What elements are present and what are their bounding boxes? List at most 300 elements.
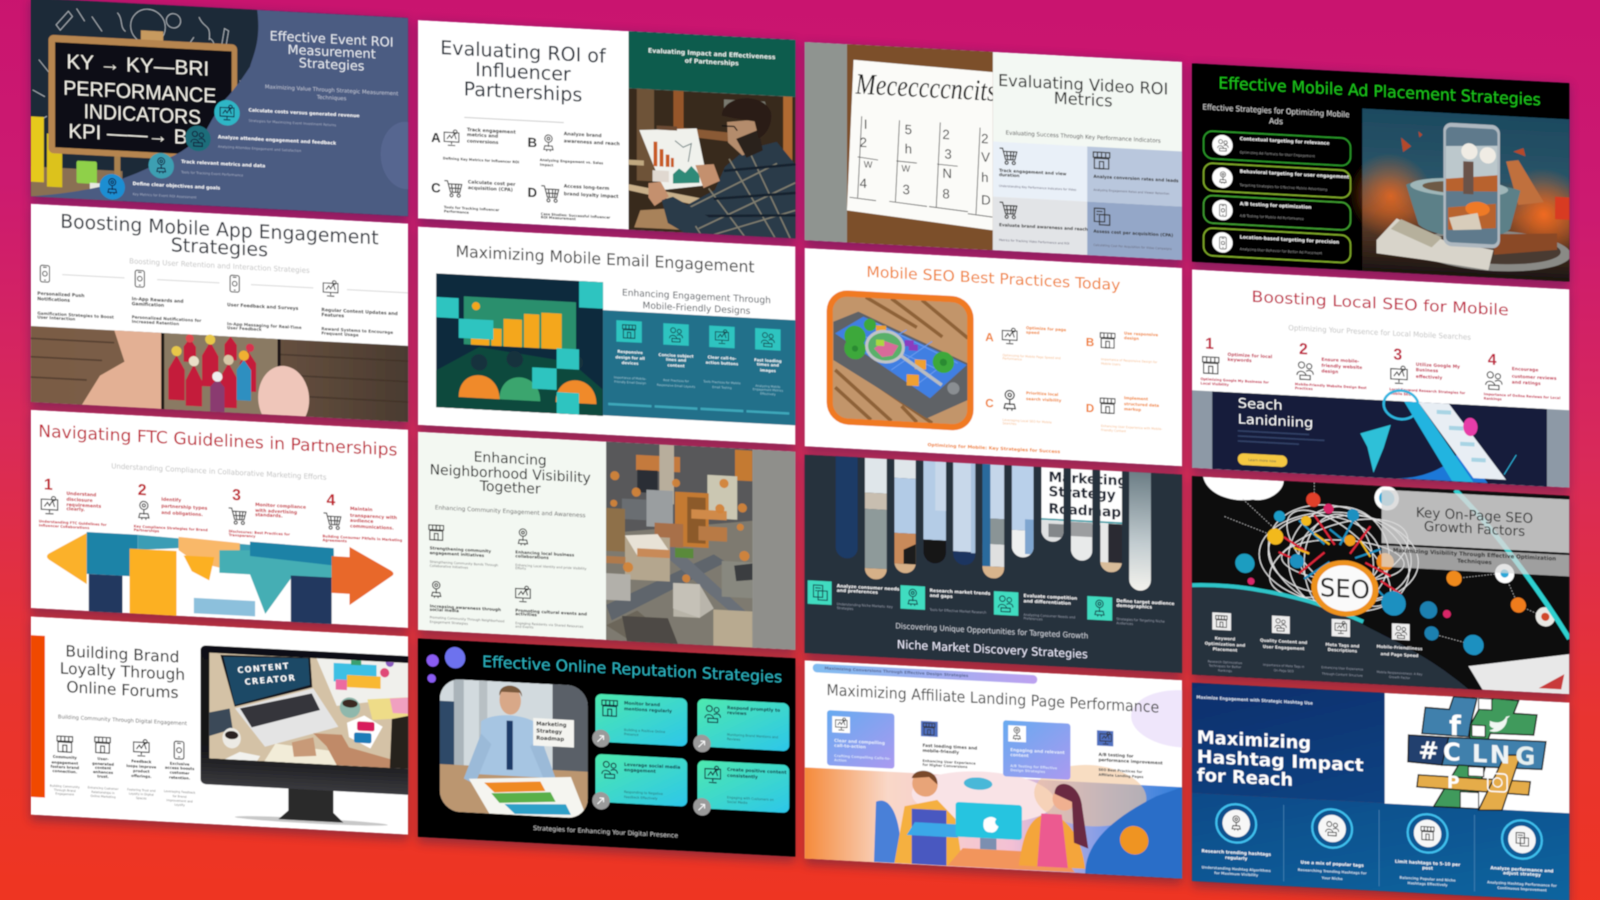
title: Maximizing Mobile Email Engagement <box>456 242 755 276</box>
metric notes: Calculating Cost Per Acquisition for Video Campaigns <box>1093 243 1172 251</box>
item headings: content <box>1010 752 1029 759</box>
item notes: Case Studies: Successful Influencer <box>541 212 611 220</box>
factor headings: Keyword <box>1215 635 1235 642</box>
icons row <box>40 265 338 297</box>
item notes: Understanding Niche Markets: Key <box>837 602 893 609</box>
photo: handwritten table on wood: W <box>864 159 873 170</box>
item notes: ROI Measurement <box>541 215 576 221</box>
ring icons <box>1216 803 1542 860</box>
icons row <box>1203 356 1502 390</box>
list of measures: Analyze attendee engagement and feedback <box>218 134 337 147</box>
item notes: for Brand <box>173 794 187 799</box>
connector lines <box>62 275 408 293</box>
step notes: Transparency <box>229 533 256 538</box>
monitor screen labels: CONTENT <box>237 661 290 675</box>
board text: INDICATORS <box>84 101 201 129</box>
step headings: customer reviews <box>1512 374 1557 382</box>
step notes: Importance of Online Reviews for Local <box>1484 392 1560 400</box>
title: Maximizing Affiliate Landing Page Performance <box>827 681 1159 717</box>
item headings: product <box>133 769 150 774</box>
arrow buttons <box>592 729 711 816</box>
card headings: consistently <box>727 773 758 780</box>
step notes: Gamification Strategies to Boost <box>37 311 114 320</box>
factor headings: Mobile-Friendliness <box>1377 644 1423 651</box>
item headings: A/B testing for <box>1098 752 1134 760</box>
step notes: Personalized Notifications for <box>132 314 202 323</box>
hashtag symbols: P <box>1447 773 1460 794</box>
slide: Niche Market Discovery Strategies <box>805 442 1182 673</box>
metric headings: Track engagement and view <box>999 168 1067 177</box>
subtitle: Optimizing Your Presence for Local Mobile Searches <box>1288 323 1471 342</box>
title: for Reach <box>1197 765 1293 791</box>
title: Strategies <box>299 56 365 75</box>
list of measures: Calculate costs versus generated revenue <box>248 107 360 119</box>
subtitle: Understanding Compliance in Collaborative Marketing Efforts <box>111 461 327 482</box>
factor headings: Descriptions <box>1328 647 1358 654</box>
item headings: loops improve <box>126 764 157 770</box>
step notes: Rankings <box>1484 396 1502 401</box>
card notes: Responding to Negative <box>624 790 663 796</box>
item notes: Efforts <box>515 566 526 571</box>
practice notes: Friendly Content <box>1101 428 1127 433</box>
photo: handwritten table on wood: 3 <box>903 182 910 197</box>
icon: purple dots <box>427 645 465 684</box>
item headings: Research market trends <box>930 588 991 597</box>
step notes: Reward Systems to Encourage <box>321 326 393 335</box>
card notes: Monitoring Brand Mentions and <box>727 733 778 739</box>
step headings: standards. <box>255 512 283 519</box>
list of measure notes: Key Metrics for Event ROI Assessment <box>133 192 197 200</box>
practice headings: Use responsive <box>1124 330 1158 337</box>
practice notes: Performance <box>1003 356 1022 361</box>
photo: handwritten table on wood: V <box>981 149 990 165</box>
column headings: Analyze performance and <box>1490 865 1553 875</box>
title: Building Brand <box>65 642 179 666</box>
practice notes: Searches <box>1003 421 1017 426</box>
side strip <box>753 449 795 650</box>
photo: handwritten table on wood: 5 <box>905 122 912 137</box>
item headings: devices <box>622 360 639 366</box>
letter markers: B <box>1086 336 1094 349</box>
step headings: Monitor compliance <box>255 502 306 511</box>
item headings: call-to-action <box>834 743 866 750</box>
title: Strategies <box>171 233 268 261</box>
subtitle: Discovering Unique Opportunities for Targeted Growth <box>895 621 1088 641</box>
item notes: Performance <box>444 209 470 215</box>
hashtag graphic panel <box>1385 693 1570 815</box>
photo: handwritten table on wood: I <box>864 117 867 132</box>
title: Growth Factors <box>1424 519 1525 540</box>
item headings: Promoting cultural events and <box>515 608 587 617</box>
item headings: awareness and reach <box>564 138 620 147</box>
icons <box>1002 328 1115 416</box>
column headings: post <box>1422 865 1433 872</box>
factor headings: User Engagement <box>1263 644 1305 651</box>
heading: Enhancing Engagement Through <box>622 288 771 306</box>
item notes: Engagement <box>55 792 75 797</box>
item headings: and gaps <box>930 593 953 600</box>
column notes: Continuous Improvement <box>1497 886 1547 892</box>
item notes: Leveraging Feedback <box>164 789 196 795</box>
title: Boosting Mobile App Engagement <box>60 210 379 249</box>
column headings: regularly <box>1225 855 1248 862</box>
step numbers: 3 <box>232 487 241 504</box>
column notes: Analyzing Hashtag Performance for <box>1487 880 1557 888</box>
item notes: Engagement Metrics <box>753 387 784 393</box>
item headings: action buttons <box>706 360 739 366</box>
title: Boosting Local SEO for Mobile <box>1252 288 1509 319</box>
photo: handwritten table on wood: 3 <box>944 146 952 162</box>
item headings: Fast loading times and <box>922 743 977 752</box>
item notes: Tools for Tracking Influencer <box>444 205 500 212</box>
step headings: clearly. <box>66 506 85 513</box>
title: Online Forums <box>66 678 179 702</box>
item notes: Collaborative Initiatives <box>430 564 468 570</box>
step headings: transparency with <box>350 513 397 521</box>
hashtag symbols: G <box>1515 741 1535 771</box>
item headings: demographics <box>1116 603 1152 611</box>
step headings: partnership types <box>161 503 208 512</box>
slide: Maximizing Affiliate Landing Page Performance <box>805 660 1233 882</box>
step notes: Mobile-Friendly Website Design Best <box>1295 382 1367 390</box>
pill headings: Contextual targeting for relevance <box>1240 136 1329 147</box>
item notes <box>834 754 1143 779</box>
item notes: Loyalty in Digital <box>129 791 154 797</box>
metric notes: Metrics for Tracking Video Performance and ROI <box>999 238 1070 246</box>
highlighted cards <box>827 710 1070 780</box>
item notes: Enhancing User Experience <box>922 759 976 766</box>
column dividers <box>1284 805 1474 891</box>
item headings: User- <box>97 757 109 761</box>
item headings: enhances <box>93 770 114 775</box>
subtitle: Techniques <box>1457 558 1492 566</box>
item headings: content <box>95 766 111 771</box>
strategy pills <box>1204 131 1351 263</box>
item headings: customer <box>170 771 190 776</box>
hashtag symbols: C <box>1443 737 1461 767</box>
pill headings: A/B testing for optimization <box>1240 201 1311 211</box>
title: Evaluating Video ROI <box>998 71 1168 99</box>
step notes: Understanding FTC Guidelines for <box>39 519 107 527</box>
list of measure notes: Analyzing Attendee Engagement and Satisfaction <box>218 145 301 153</box>
crayons and desk <box>31 116 122 202</box>
photo: hands and figurines <box>30 325 409 423</box>
step numbers: 4 <box>327 492 336 509</box>
lavender blob <box>1131 688 1233 750</box>
item headings: social media <box>430 607 459 613</box>
slide: Key On-Page SEO Growth Factors <box>1192 476 1569 694</box>
step notes: Building Consumer Pitfalls in Marketing <box>322 534 403 543</box>
photo: handwritten table on wood: 2 <box>942 127 950 142</box>
photo: phone and cup <box>1348 108 1590 283</box>
photo: handwritten table on wood: h <box>981 170 989 185</box>
slide: Maximizing Hashtag Impact for Reach <box>1192 682 1570 900</box>
item headings: Evaluate competition <box>1023 593 1077 602</box>
factor headings: Meta Tags and <box>1325 642 1359 649</box>
item headings: Define target audience <box>1116 598 1174 607</box>
step headings: Notifications <box>37 296 70 304</box>
slide: Mobile SEO Best Practices Today <box>805 248 1182 466</box>
item headings: mobile-friendly <box>922 748 959 756</box>
item headings: connection. <box>52 769 78 774</box>
step headings: Understand <box>66 491 96 498</box>
step notes: Mobile SEO <box>1389 391 1411 397</box>
pill headings: Location-based targeting for precision <box>1240 234 1339 246</box>
step notes: Disclosures: Best Practices for <box>229 529 290 537</box>
factor notes: Enhancing User Experience <box>1321 665 1363 671</box>
photo: handwritten table on wood: N <box>942 166 952 181</box>
step notes: Local Visibility <box>1201 381 1230 387</box>
item headings: Access long-term <box>564 183 610 192</box>
item headings: conversions <box>467 138 499 146</box>
item notes: Strategies for Targeting Niche <box>1116 617 1165 624</box>
step headings: keywords <box>1228 357 1252 364</box>
practice headings: search visibility <box>1026 396 1062 403</box>
heading: Mobile-Friendly Designs <box>643 301 751 317</box>
board text: KY → KY—BRI <box>66 51 209 81</box>
card notes: Feedback Effectively <box>624 795 658 801</box>
title: Neighborhood Visibility <box>430 462 591 487</box>
item headings: Fast loading <box>754 357 782 364</box>
metric headings: duration <box>999 172 1020 179</box>
item headings: fosters brand <box>50 765 79 770</box>
item notes: Defining Key Metrics for Influencer ROI <box>443 156 519 164</box>
step headings: friendly website <box>1321 363 1362 371</box>
item notes: Responsive Email Layouts <box>657 383 696 389</box>
column notes: Your Niche <box>1321 876 1343 881</box>
metric headings: Assess cost per acquisition (CPA) <box>1093 229 1173 239</box>
item notes: SEO Best Practices for <box>1098 768 1142 774</box>
item notes: Effectively <box>760 392 776 396</box>
pill notes: Targeting Strategies for Effective Mobile Advertising <box>1239 183 1327 192</box>
network globe <box>1224 477 1555 659</box>
factor notes: On-Page SEO <box>1274 668 1294 673</box>
banner heading: Seach <box>1238 397 1283 414</box>
item notes: and Events <box>515 624 534 629</box>
step headings: requirements <box>66 502 101 510</box>
card notes: Presence <box>624 732 639 737</box>
item notes: Best Practices for <box>663 378 690 383</box>
item notes: Promoting Community Through Neighborhood <box>430 615 504 623</box>
slide: Boosting Mobile App Engagement <box>31 204 408 438</box>
item headings: Analyze brand <box>564 131 602 139</box>
item notes: Spaces <box>136 796 147 801</box>
item headings: acquisition (CPA) <box>468 185 513 193</box>
divider <box>464 117 564 123</box>
item headings: Enhancing local business <box>515 549 575 558</box>
tagline: Maximize Engagement with Strategic Hashtag Use <box>1196 695 1313 707</box>
item notes: Engagement Strategies <box>430 620 468 626</box>
item notes: Through Brand <box>53 788 76 793</box>
list of measures: Track relevant metrics and data <box>181 159 265 169</box>
step headings: In-App Rewards and <box>132 296 184 305</box>
item headings: Clear and compelling <box>834 738 885 747</box>
photo: handwritten table on wood: W <box>902 163 911 174</box>
practice notes: Enhancing User Experience with Mobile- <box>1101 424 1162 431</box>
metric notes: Understanding Key Performance Indicators for Video <box>999 184 1077 192</box>
card headings: Leverage social media <box>624 762 680 771</box>
step numbers: 2 <box>1299 341 1308 358</box>
title: Together <box>479 478 541 498</box>
footer line: Strategies for Enhancing Your Digital Presence <box>533 825 678 840</box>
item headings: Strengthening community <box>430 545 491 554</box>
step notes: Local Keyword Research Strategies for <box>1389 387 1465 395</box>
card headings: engagement <box>624 767 657 775</box>
item headings: performance improvement <box>1098 757 1163 766</box>
illustration: audience watching chart <box>436 273 603 416</box>
title: Maximizing <box>1197 727 1311 754</box>
letter markers: C <box>985 397 994 410</box>
header text: of Partnerships <box>685 58 739 67</box>
item notes: Design Strategies <box>1010 768 1045 774</box>
slide: Effective Event ROI Measurement Strategies <box>31 0 432 218</box>
hashtag symbols: N <box>1490 740 1510 770</box>
step headings: Utilize Google My <box>1416 362 1460 370</box>
list of measures <box>132 107 360 191</box>
item notes: Tools Practices for Mobile <box>702 379 741 385</box>
item headings: times and <box>757 362 779 368</box>
photo: man reading chart <box>629 88 796 239</box>
step numbers: 1 <box>44 476 53 494</box>
item headings: Increasing awareness through <box>430 603 501 612</box>
step headings: and ratings <box>1512 379 1541 387</box>
step notes: Influencer Collaborations <box>39 523 89 530</box>
factor notes: Mobile Responsiveness: A Key <box>1377 670 1423 676</box>
step notes: User Feedback <box>227 325 262 332</box>
step headings: Maintain <box>350 506 373 513</box>
factor icon tiles <box>1212 612 1410 640</box>
photo: handwritten table on wood: 4 <box>860 176 867 191</box>
tagline pill <box>813 663 1037 684</box>
item notes: Friendly Email Design <box>614 380 646 385</box>
header band <box>629 31 796 97</box>
title panel <box>1382 490 1569 577</box>
step headings: Ensure mobile- <box>1321 357 1359 365</box>
item notes: Loyalty <box>174 803 185 807</box>
item notes: Strategies <box>837 606 854 611</box>
illustration: handshake with arrows <box>47 530 393 628</box>
blackboard <box>48 25 237 163</box>
step numbers: 3 <box>1393 346 1402 364</box>
icon: step circles <box>99 93 240 206</box>
practice headings: markup <box>1124 406 1141 412</box>
letter markers: A <box>985 331 994 344</box>
footer line: Optimizing for Mobile: Key Strategies for Success <box>928 442 1061 455</box>
step notes: In-App Messaging for Real-Time <box>227 321 302 330</box>
step headings: User Feedback and Surveys <box>227 302 299 312</box>
item headings: Exclusive <box>170 762 190 767</box>
step headings: and obligations. <box>161 510 203 518</box>
item headings: images <box>760 367 777 373</box>
icon tiles <box>616 320 781 351</box>
item notes: Fostering Trust and <box>127 787 156 793</box>
photo strips: man with roadmap: Marketing <box>1048 470 1127 490</box>
metric headings: Evaluate brand awareness and reach <box>999 222 1088 233</box>
subtitle: Techniques <box>316 95 347 102</box>
subtitle: Effective Strategies for Optimizing Mobile <box>1203 103 1350 119</box>
item headings: content <box>667 362 685 368</box>
item notes: Email Testing <box>712 385 732 390</box>
step headings: Encourage <box>1512 366 1538 374</box>
factor notes: Growth Factor <box>1389 675 1411 680</box>
step notes: Agreements <box>322 538 347 543</box>
practice headings: Optimize for page <box>1026 325 1066 332</box>
item headings: Feedback <box>131 759 152 764</box>
item headings: Concise subject <box>659 352 694 359</box>
board text: PERFORMANCE <box>63 78 216 108</box>
item notes: Importance of Mobile- <box>614 375 646 381</box>
header text: Evaluating Impact and Effectiveness <box>648 48 776 61</box>
practice notes: Optimizing for Mobile Page Speed and <box>1003 353 1061 360</box>
item headings: Calculate cost per <box>468 179 516 188</box>
letter markers: B <box>528 135 537 150</box>
column notes: Understanding Hashtag Algorithms <box>1202 865 1271 873</box>
slide: Evaluating ROI of Influencer Partnerships <box>418 20 796 239</box>
card headings: reviews <box>727 710 747 717</box>
item notes: A/B Testing for Effective <box>1010 764 1058 770</box>
factor headings: and Page Speed <box>1381 651 1418 658</box>
item notes: Tools for Effective Market Research <box>929 608 986 615</box>
card headings: mentions regularly <box>624 706 672 715</box>
item headings: and preferences <box>837 588 878 596</box>
photo: handwritten table on wood: Mececcccncits <box>855 68 996 108</box>
factor headings: Optimization and <box>1205 641 1245 648</box>
item notes: Online Marketing <box>90 794 116 799</box>
step notes: Key Compliance Strategies for Brand <box>134 524 208 532</box>
item notes: Crafting Compelling Calls-to- <box>834 754 891 761</box>
step headings: Features <box>321 312 344 319</box>
title: Measurement <box>288 43 376 62</box>
title: Key On-Page SEO <box>1416 505 1533 527</box>
title: Partnerships <box>464 77 582 107</box>
title: Evaluating ROI of <box>440 36 607 68</box>
photo strips: man with roadmap <box>835 444 1152 595</box>
step numbers: 4 <box>1488 351 1497 369</box>
factor notes: Importance of Meta Tags in <box>1263 663 1304 669</box>
item notes: Relationships in <box>91 790 115 795</box>
step headings: Identify <box>161 497 181 504</box>
practice headings: design <box>1124 335 1139 341</box>
banner button: Learn more now <box>1248 458 1276 463</box>
title: Mobile SEO Best Practices Today <box>866 263 1121 294</box>
item headings: Analyze consumer needs <box>837 583 900 593</box>
slide: Effective Online Reputation Strategies <box>418 638 795 857</box>
factor notes: Through Content Structure <box>1321 672 1363 678</box>
icons row <box>57 735 184 759</box>
practice headings: speed <box>1026 330 1040 335</box>
item headings: activities <box>515 611 537 617</box>
item notes: Analyzing Mobile <box>755 384 781 389</box>
pill notes: Analyzing User Behavior for Better Ad Placement <box>1240 247 1323 255</box>
step notes: Practices <box>1295 386 1313 391</box>
factor notes: Research Optimization <box>1208 659 1242 665</box>
practice notes: Leveraging Local SEO for Mobile <box>1003 418 1052 424</box>
step headings: disclosure <box>66 497 93 504</box>
item headings: trust. <box>97 774 110 779</box>
card headings: Monitor brand <box>624 700 660 708</box>
step headings: Regular Content Updates and <box>321 307 398 317</box>
step headings: design <box>1321 368 1338 375</box>
laptop corner <box>1468 649 1569 694</box>
column headings: Use a mix of popular tags <box>1301 860 1364 869</box>
cloud <box>1203 477 1284 502</box>
title: Influencer <box>475 58 571 86</box>
list of measures: Define clear objectives and goals <box>133 181 220 192</box>
pill icons <box>1212 134 1233 253</box>
diagonal accent <box>1455 490 1569 639</box>
photo: aerial city <box>606 442 753 648</box>
column notes: Researching Trending Hashtags for <box>1298 868 1367 876</box>
